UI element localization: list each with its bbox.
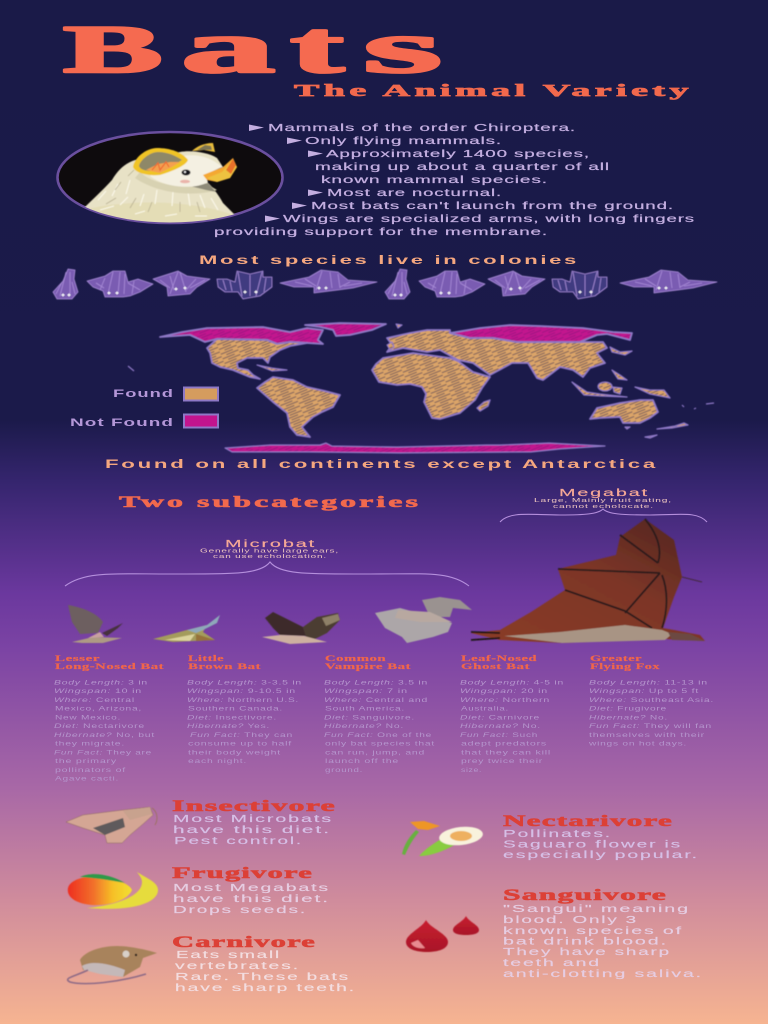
column: common vampire bat: Wingspan: 7 in: [324, 688, 408, 695]
icon: mango and banana: [68, 872, 158, 909]
diet: frugivore: Drops seeds.: [173, 905, 307, 916]
icon: moth: [66, 807, 157, 843]
column: leaf-nosed ghost bat: [460, 653, 564, 774]
South America: [257, 377, 340, 437]
column: little brown bat: Diet: Insectivore.: [187, 714, 277, 721]
bullet list: bat facts: [214, 122, 695, 238]
icon: hanging bat 9: [552, 271, 607, 299]
title: a: [181, 6, 275, 89]
column: lesser long-nosed bat: Mexico, Arizona,: [55, 706, 142, 713]
column: common vampire bat: Where: Central and: [324, 697, 428, 704]
world map: [128, 323, 714, 453]
column: lesser long-nosed bat: Hibernate? No, but: [54, 732, 155, 739]
column: leaf-nosed ghost bat: Body Length: 4-5 in: [460, 679, 564, 686]
title: t: [290, 6, 344, 88]
column: little brown bat: each night.: [188, 758, 247, 765]
icon: hanging bat 2: [87, 271, 153, 297]
diet: nectarivore: especially popular.: [503, 850, 699, 861]
column: common vampire bat: [324, 653, 435, 774]
column: common vampire bat: South America.: [325, 706, 405, 713]
diet: insectivore: have this diet.: [173, 825, 331, 836]
Africa: [372, 353, 490, 419]
diet: frugivore: have this diet.: [173, 894, 330, 905]
diet: sanguivore: known species of: [503, 926, 683, 937]
column: greater flying fox: themselves with their: [589, 732, 705, 739]
North America: [207, 339, 307, 379]
bullet list: bat facts: Approximately 1400 species,: [326, 148, 590, 160]
column: greater flying fox: wings on hot days.: [587, 741, 687, 748]
diet: carnivore: Eats small: [176, 950, 281, 961]
column: lesser long-nosed bat: Lesser: [55, 653, 100, 663]
column: common vampire bat: Body Length: 3.5 in: [324, 679, 428, 686]
bat colony row: [53, 269, 717, 299]
title: s: [363, 7, 442, 88]
megabat label: cannot echolocate.: [553, 504, 654, 510]
Antarctica: [225, 443, 605, 453]
diet: insectivore: Pest control.: [174, 836, 303, 847]
photo: lesser long-nosed bat: [68, 605, 123, 643]
icon: hanging bat 7: [419, 271, 485, 297]
column: common vampire bat: Hibernate? No.: [324, 723, 404, 730]
megabat brace: [500, 509, 707, 522]
column: lesser long-nosed bat: pollinators of: [55, 767, 126, 774]
diet: frugivore: Frugivore: [172, 865, 313, 882]
column: greater flying fox: Where: Southeast Asia.: [589, 697, 714, 704]
map legend: Found: [113, 388, 174, 400]
diet: sanguivore: bat drink blood.: [503, 936, 668, 948]
diet: nectarivore: Nectarivore: [503, 813, 673, 830]
column: little brown bat: Southern Canada.: [188, 706, 283, 713]
column: lesser long-nosed bat: Body Length: 3 in: [54, 679, 148, 686]
column: lesser long-nosed bat: Fun Fact: They are: [54, 749, 152, 756]
megabat label: Megabat: [559, 487, 649, 499]
column: greater flying fox: Wingspan: Up to 5 ft: [589, 688, 699, 695]
column: little brown bat: [187, 653, 302, 765]
column: lesser long-nosed bat: Agave cacti.: [55, 776, 119, 783]
bullet list: bat facts: known mammal species.: [321, 174, 548, 186]
diet: sanguivore: Sanguivore: [503, 887, 667, 904]
microbat label: Generally have large ears,: [200, 548, 339, 554]
map caption: Found on all continents except Antarctica: [105, 459, 658, 471]
Australia: [590, 400, 658, 423]
column: little brown bat: Where: Northern U.S.: [187, 697, 299, 704]
megabat label: Large, Mainly fruit eating,: [534, 498, 672, 504]
bullet list: bat facts: Mammals of the order Chiroptera.: [268, 122, 576, 134]
microbat brace: [65, 562, 469, 586]
column: leaf-nosed ghost bat: Wingspan: 20 in: [460, 688, 548, 695]
diet: carnivore: vertebrates.: [175, 961, 300, 972]
column: common vampire bat: ground.: [325, 767, 363, 774]
icon: hanging bat 1: [53, 269, 78, 299]
column: common vampire bat: Diet: Sanguivore.: [324, 714, 415, 721]
column: leaf-nosed ghost bat: that they can kill: [461, 749, 551, 756]
column: little brown bat: their body weight: [188, 749, 281, 756]
column: little brown bat: Brown Bat: [188, 661, 261, 671]
bullet list: bat facts: Wings are specialized arms, with long fingers: [283, 213, 695, 225]
column: greater flying fox: Hibernate? No.: [589, 714, 668, 721]
diet: carnivore: Rare. These bats: [175, 972, 350, 983]
diet: carnivore: Carnivore: [172, 934, 316, 951]
icon: hanging bat 4: [217, 271, 272, 299]
column: little brown bat: Body Length: 3-3.5 in: [187, 679, 302, 686]
column: lesser long-nosed bat: Wingspan: 10 in: [54, 688, 142, 695]
UK and Iceland: [387, 324, 402, 350]
icon: hanging bat 5: [280, 270, 377, 293]
diet: nectarivore: [503, 813, 699, 861]
icon: mouse: [68, 946, 157, 984]
column: leaf-nosed ghost bat: Australia.: [461, 706, 509, 713]
icon: hanging bat 10: [620, 270, 717, 293]
column: leaf-nosed ghost bat: Leaf-Nosed: [461, 653, 537, 663]
icon: hanging bat 3: [153, 271, 210, 296]
bullet list: bat facts: providing support for the membrane.: [214, 226, 548, 238]
column: leaf-nosed ghost bat: prey twice their: [461, 758, 543, 765]
icon: blood drops: [406, 916, 479, 952]
column: greater flying fox: Flying Fox: [590, 661, 660, 671]
column: common vampire bat: only bat species that: [325, 741, 435, 748]
photo: common vampire bat: [262, 612, 340, 644]
microbat label: can use echolocation.: [213, 554, 327, 560]
diet: insectivore: Most Microbats: [173, 814, 333, 825]
icon: hanging bat 6: [385, 269, 410, 299]
column: lesser long-nosed bat: the primary: [55, 758, 117, 765]
column: greater flying fox: Fun Fact: They will fan: [589, 723, 712, 730]
microbat label: [200, 538, 339, 560]
Southeast Asian islands: [572, 347, 688, 438]
column: lesser long-nosed bat: New Mexico.: [55, 714, 121, 721]
column: little brown bat: consume up to half: [188, 741, 292, 748]
column: common vampire bat: Fun Fact: One of the: [324, 732, 432, 739]
portrait: white bat in oval: [58, 132, 282, 224]
column: leaf-nosed ghost bat: Ghost Bat: [461, 661, 530, 671]
Madagascar: [477, 400, 490, 411]
column: greater flying fox: Body Length: 11-13 in: [589, 679, 708, 686]
column: leaf-nosed ghost bat: adept predators: [461, 741, 547, 748]
column: greater flying fox: [587, 653, 714, 748]
bullet list: bat facts: Only flying mammals.: [305, 135, 502, 147]
column: leaf-nosed ghost bat: Fun Fact: Such: [460, 732, 538, 739]
column: common vampire bat: can run, jump, and: [325, 749, 425, 756]
column: lesser long-nosed bat: [54, 653, 164, 783]
Cuba: [257, 365, 287, 371]
bullet arrows: [249, 124, 323, 222]
title: B: [63, 12, 163, 87]
megabat label: [534, 487, 672, 510]
subtitle: The Animal Variety: [294, 81, 693, 100]
diet: insectivore: [172, 798, 336, 847]
photo: leaf-nosed ghost bat: [375, 597, 472, 643]
column: lesser long-nosed bat: Diet: Nectarivore: [54, 723, 145, 730]
diet: nectarivore: Pollinates.: [503, 829, 612, 840]
map legend: Not Found: [70, 417, 174, 429]
bullet list: bat facts: Most are nocturnal.: [327, 187, 502, 199]
column: leaf-nosed ghost bat: Diet: Carnivore: [460, 714, 540, 721]
bullet list: bat facts: making up about a quarter of all: [315, 161, 610, 173]
subcategories heading: Two subcategories: [119, 494, 421, 511]
column: common vampire bat: launch off the: [325, 758, 399, 765]
column: common vampire bat: Vampire Bat: [325, 661, 411, 671]
column: leaf-nosed ghost bat: Where: Northern: [460, 697, 550, 704]
icon: flowers: [402, 821, 484, 856]
column: lesser long-nosed bat: Long-Nosed Bat: [55, 661, 164, 671]
column: leaf-nosed ghost bat: size.: [461, 767, 482, 774]
column: lesser long-nosed bat: they migrate.: [55, 741, 125, 748]
map legend: [70, 388, 218, 429]
diet: sanguivore: blood. Only 3: [503, 915, 638, 926]
title: [63, 6, 442, 89]
column: greater flying fox: Greater: [590, 653, 642, 663]
column: lesser long-nosed bat: Where: Central: [54, 697, 135, 704]
diet: sanguivore: anti-clotting saliva.: [503, 969, 703, 980]
icon: hanging bat 8: [488, 271, 545, 296]
column: greater flying fox: Diet: Frugivore: [589, 706, 667, 713]
column: little brown bat: Fun Fact: They can: [190, 732, 293, 739]
Pacific islands: [128, 366, 714, 409]
column: leaf-nosed ghost bat: Hibernate? No.: [460, 723, 541, 730]
diet: nectarivore: Saguaro flower is: [503, 840, 682, 850]
diet: insectivore: Insectivore: [172, 798, 336, 815]
photo: little brown bat: [153, 615, 220, 642]
diet: carnivore: [172, 934, 356, 994]
bullet list: bat facts: Most bats can't launch from the ground.: [311, 200, 674, 212]
diet: sanguivore: They have sharp: [503, 947, 671, 958]
Greenland: [305, 323, 386, 336]
diet: frugivore: Most Megabats: [173, 883, 330, 894]
diet: sanguivore: [503, 887, 703, 980]
diet: carnivore: have sharp teeth.: [175, 983, 356, 994]
photo: greater flying fox: [471, 519, 705, 643]
column: little brown bat: Hibernate? Yes.: [187, 723, 270, 730]
North America not found region: [160, 327, 323, 344]
microbat label: Microbat: [225, 538, 316, 550]
Russia not found region: [450, 325, 632, 342]
diet: frugivore: [172, 865, 330, 916]
diet: sanguivore: teeth and: [503, 958, 601, 969]
colonies heading: Most species live in colonies: [199, 255, 579, 267]
column: common vampire bat: Common: [325, 653, 386, 663]
column: little brown bat: Little: [188, 653, 224, 663]
column: little brown bat: Wingspan: 9-10.5 in: [187, 688, 296, 695]
diet: sanguivore: "Sangui" meaning: [503, 904, 690, 915]
Europe and Asia: [387, 330, 607, 380]
